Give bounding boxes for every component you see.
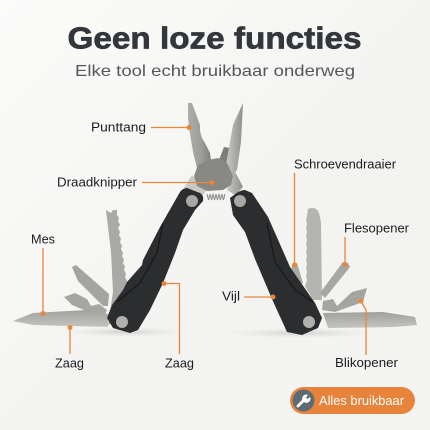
callout: Mes (31, 232, 55, 316)
badge: Alles bruikbaar (290, 387, 415, 414)
badge: Alles bruikbaar: Alles bruikbaar (319, 393, 405, 408)
icon: wrench (292, 390, 314, 412)
callout: Blikopener: Blikopener (335, 356, 398, 370)
right bracket (227, 168, 243, 195)
callout: Vijl (222, 290, 276, 304)
left handle (107, 188, 203, 333)
callout: Schroevendraaier: Schroevendraaier (294, 158, 396, 172)
right handle groove (267, 223, 313, 302)
subtitle: Elke tool echt bruikbaar onderweg (75, 63, 355, 80)
callout: Zaag left (55, 325, 84, 370)
left knife blade (13, 310, 108, 327)
spring (207, 194, 225, 200)
multitool illustration (13, 103, 417, 338)
right flat screwdriver (320, 262, 350, 298)
callout: Draadknipper: Draadknipper (57, 176, 137, 190)
left base screw (116, 316, 128, 328)
right handle (230, 190, 322, 335)
callout: Zaag handle: Zaag (165, 356, 194, 370)
ground shadows (65, 327, 375, 338)
left jaw (188, 103, 211, 176)
callout: Blikopener (335, 298, 398, 370)
callout: Punttang (91, 120, 192, 134)
left phillips screwdriver (72, 265, 109, 306)
right pivot screw (234, 195, 246, 207)
right saw blade (305, 208, 322, 300)
right tools (290, 208, 417, 328)
callout: Flesopener: Flesopener (344, 222, 409, 236)
right jaw (226, 103, 243, 175)
right base screw (303, 316, 315, 328)
callout: Draadknipper (57, 176, 214, 190)
callout: Vijl: Vijl (222, 290, 240, 304)
left saw blade (106, 210, 128, 325)
right jaw back step (219, 147, 230, 164)
title: Geen loze functies (68, 20, 362, 56)
right small file (290, 263, 303, 286)
left bottle opener (64, 293, 107, 316)
left bracket (184, 175, 207, 196)
left handle groove (117, 223, 163, 302)
pliers head (184, 103, 243, 200)
callout: Schroevendraaier (292, 158, 396, 268)
left pivot screw (186, 195, 198, 207)
pivot hub (194, 158, 233, 191)
right can opener (322, 288, 367, 312)
left tools (13, 210, 128, 327)
callout: Zaag handle (162, 281, 194, 370)
callout: Flesopener (342, 222, 409, 267)
callout: Punttang: Punttang (91, 120, 146, 134)
callout: Mes: Mes (31, 232, 55, 246)
right knife blade (323, 312, 417, 328)
callout: Zaag left: Zaag (55, 356, 84, 370)
